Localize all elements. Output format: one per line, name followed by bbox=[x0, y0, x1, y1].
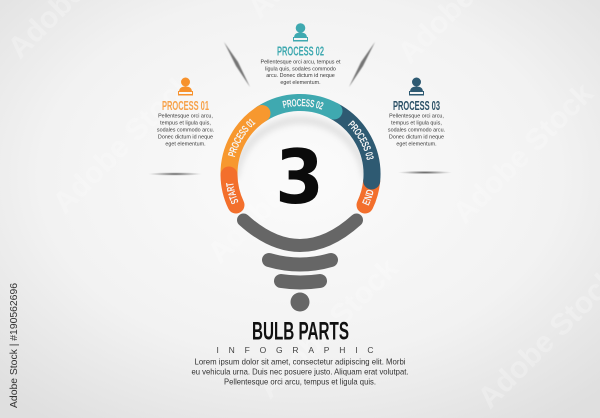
icon: process 02 person bbox=[293, 23, 308, 42]
text: process 03 body bbox=[388, 114, 445, 148]
text: process 02 body: ligula quis, sodales commodo bbox=[265, 66, 336, 72]
text: process 01 body: sodales commodo arcu. bbox=[157, 128, 214, 134]
description: Pellentesque orci arcu, tempus et ligula quis. bbox=[224, 376, 376, 386]
bulb ring segments bbox=[229, 102, 372, 205]
description: Lorem ipsum dolor sit amet, consectetur adipiscing elit. Morbi bbox=[194, 356, 406, 366]
text: process 01 body: eget elementum. bbox=[165, 142, 206, 148]
segment: start bbox=[229, 175, 236, 205]
text: process 01 body: Pellentesque orci arcu, bbox=[158, 114, 213, 120]
ring labels bbox=[226, 98, 374, 206]
segment: process 01 bbox=[229, 114, 262, 174]
text: process 01 body: Donec dictum id neque bbox=[158, 134, 213, 140]
ring shadow bbox=[235, 120, 366, 178]
ring labels: PROCESS 03 bbox=[348, 120, 374, 160]
text: process 03 body: Donec dictum id neque bbox=[389, 134, 444, 140]
heading: process 03: PROCESS 03 bbox=[393, 98, 440, 113]
text: process 02 body: Pellentesque orci arcu, tempus et bbox=[260, 60, 341, 66]
text: process 01 body bbox=[157, 114, 214, 148]
description: eu vehicula urna. Duis nec posuere justo. Aliquam erat volutpat. bbox=[192, 366, 408, 376]
subtitle: INFOGRAPHIC bbox=[216, 345, 374, 355]
text: process 03 body: sodales commodo arcu. bbox=[388, 128, 445, 134]
side credit text: Adobe Stock | #190562696 bbox=[9, 283, 20, 408]
icon: process 03 person bbox=[409, 78, 424, 96]
segment: process 02 bbox=[262, 102, 334, 114]
segment: end bbox=[365, 181, 372, 205]
big number 3: 3 bbox=[275, 135, 324, 222]
text: process 03 body: eget elementum. bbox=[396, 142, 437, 148]
text: process 02 body: arcu. Donec dictum id neque bbox=[266, 73, 335, 79]
description bbox=[192, 356, 408, 386]
segment: process 03 bbox=[334, 111, 372, 181]
decorative shadow lines bbox=[148, 42, 452, 176]
heading: process 01: PROCESS 01 bbox=[162, 98, 209, 113]
ring labels: START bbox=[226, 183, 238, 204]
heading: process 02: PROCESS 02 bbox=[277, 44, 324, 58]
text: process 01 body: tempus et ligula quis, bbox=[160, 120, 211, 126]
title: BULB PARTS bbox=[252, 318, 349, 346]
ring labels: PROCESS 01 bbox=[228, 118, 256, 157]
icon: process 01 person bbox=[178, 78, 193, 96]
bulb base bar 1 bbox=[269, 260, 331, 264]
text: process 03 body: Pellentesque orci arcu, bbox=[389, 114, 444, 120]
watermark: Adobe Stock bbox=[447, 77, 600, 230]
ring labels: PROCESS 02 bbox=[282, 98, 324, 110]
bulb base bbox=[244, 220, 356, 282]
watermark: Adobe bbox=[202, 181, 291, 270]
bulb base bar 2 bbox=[281, 281, 320, 282]
text: process 03 body: tempus et ligula quis, bbox=[391, 120, 442, 126]
watermark: Adobe Stock bbox=[47, 67, 200, 220]
bulb base arc bbox=[244, 220, 356, 246]
ring labels: END bbox=[362, 190, 374, 206]
text: process 02 body bbox=[260, 60, 341, 86]
bulb tip bbox=[290, 292, 310, 312]
watermark: Adobe Stock bbox=[252, 252, 405, 405]
text: process 02 body: eget elementum. bbox=[280, 80, 321, 86]
